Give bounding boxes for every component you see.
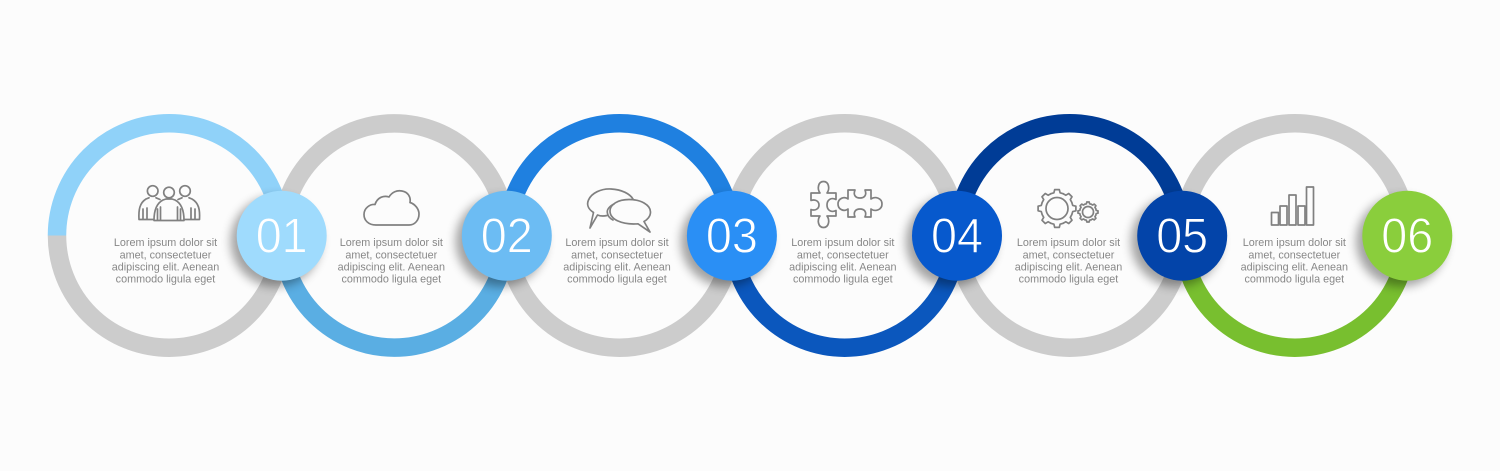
caption 4: commodo ligula eget: [793, 274, 893, 286]
caption 5: amet, consectetuer: [1023, 249, 1115, 261]
caption 6: Lorem ipsum dolor sit: [1243, 237, 1346, 249]
node 06: [1356, 191, 1452, 286]
caption 2: commodo ligula eget: [341, 274, 441, 286]
ring 5 arc: navy top: [958, 123, 1182, 236]
node 01: 01: [256, 210, 308, 264]
caption 5: adipiscing elit. Aenean: [1015, 261, 1122, 273]
caption 1: Lorem ipsum dolor sit: [114, 237, 217, 249]
caption 2: amet, consectetuer: [345, 249, 438, 261]
caption 3: amet, consectetuer: [571, 249, 663, 261]
node 05: [1131, 191, 1227, 286]
panel 1: team: [112, 186, 219, 286]
node 01: [231, 191, 327, 286]
node 04: 04: [931, 210, 983, 264]
node 02: [456, 191, 552, 286]
caption 1: amet, consectetuer: [120, 249, 212, 261]
icon: puzzle pieces: [811, 182, 882, 228]
node 02: 02: [481, 210, 533, 264]
caption 2: Lorem ipsum dolor sit: [340, 237, 443, 249]
caption 5: commodo ligula eget: [1019, 274, 1118, 286]
caption 6: commodo ligula eget: [1244, 274, 1344, 286]
ring 6 arc: green bottom: [1183, 236, 1407, 348]
panel 4: puzzle: [789, 182, 897, 286]
ring 4 arc: royal blue bottom: [732, 236, 957, 348]
caption 3: commodo ligula eget: [567, 274, 667, 286]
panel 5: gears: [1015, 190, 1122, 286]
panel 2: cloud: [338, 191, 445, 286]
icon: bar chart: [1272, 187, 1314, 225]
node 03: [681, 191, 777, 286]
caption 3: adipiscing elit. Aenean: [563, 261, 671, 273]
caption 5: Lorem ipsum dolor sit: [1017, 237, 1120, 249]
icon: gears: [1038, 190, 1098, 227]
caption 2: adipiscing elit. Aenean: [338, 261, 445, 273]
node 05: 05: [1156, 210, 1208, 264]
icon: people: [139, 186, 200, 220]
caption 4: Lorem ipsum dolor sit: [791, 237, 894, 249]
node 03: 03: [706, 210, 758, 264]
grey ring segments: [57, 123, 1407, 348]
icon: speech bubbles: [588, 189, 650, 232]
caption 1: commodo ligula eget: [116, 274, 215, 286]
icon: cloud: [364, 191, 419, 225]
caption 4: adipiscing elit. Aenean: [789, 261, 897, 273]
ring 1 arc: light blue top: [57, 123, 281, 236]
caption 4: amet, consectetuer: [797, 249, 889, 261]
panel 6: bar chart: [1241, 187, 1348, 286]
caption 6: adipiscing elit. Aenean: [1241, 261, 1348, 273]
caption 3: Lorem ipsum dolor sit: [565, 237, 669, 249]
ring 3 arc: blue top: [507, 123, 732, 236]
ring 2 arc: sky blue bottom: [282, 236, 506, 348]
node 06: 06: [1381, 210, 1433, 264]
caption 6: amet, consectetuer: [1248, 249, 1341, 261]
caption 1: adipiscing elit. Aenean: [112, 261, 219, 273]
panel 3: speech: [563, 189, 671, 286]
node 04: [906, 191, 1002, 286]
